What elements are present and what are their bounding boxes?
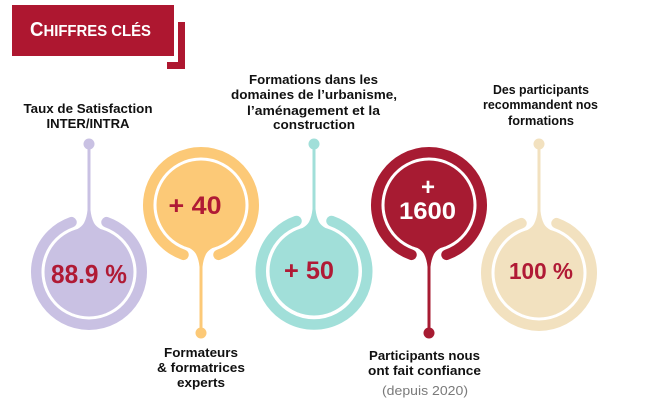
label: formations: l’aménagement et la — [247, 104, 381, 118]
value: 88.9 % — [51, 259, 127, 289]
label: recommandation: recommandent nos — [483, 98, 598, 112]
label: participants — [368, 349, 481, 398]
stat: participants +1600 — [368, 152, 482, 398]
label: recommandation: formations — [508, 114, 574, 128]
title text: CHIFFRES CLÉS — [30, 19, 151, 41]
label: formations: construction — [273, 118, 355, 132]
label: formations: Formations dans les — [249, 73, 378, 87]
label: participants: ont fait confiance — [368, 364, 481, 378]
value — [399, 174, 456, 225]
stat: recommandation 100 % — [483, 83, 598, 326]
value: + 50 — [284, 257, 334, 285]
label: formations: domaines de l’urbanisme, — [231, 88, 397, 102]
value: 100 % — [509, 258, 573, 284]
value: + — [421, 174, 435, 201]
label: formateurs: & formatrices — [157, 361, 245, 375]
title background — [12, 5, 174, 56]
purple drop marker — [36, 138, 142, 325]
red drop marker — [376, 152, 482, 338]
value: + 40 — [168, 192, 222, 220]
title banner — [12, 5, 185, 69]
stat: formations +50 — [231, 73, 397, 325]
label: recommandation — [483, 83, 598, 128]
orange drop marker — [148, 152, 254, 338]
label: participants: (depuis 2020) — [382, 383, 468, 398]
label: formateurs: Formateurs — [164, 346, 238, 360]
stat: taux de satisfaction 88.9 % — [24, 102, 152, 325]
label: formations — [231, 73, 397, 132]
stat: formateurs +40 — [148, 152, 254, 390]
label: taux de satisfaction: INTER/INTRA — [46, 117, 130, 131]
label: formateurs: experts — [177, 376, 225, 390]
label: taux de satisfaction — [24, 102, 152, 131]
label: taux de satisfaction: Taux de Satisfaction — [24, 102, 152, 116]
label: recommandation: Des participants — [493, 83, 589, 97]
teal drop marker — [261, 138, 367, 325]
cream drop marker — [486, 138, 592, 326]
corner bracket — [167, 22, 185, 69]
label: formateurs — [157, 346, 245, 390]
label: participants: Participants nous — [369, 349, 480, 363]
value: 1600 — [399, 198, 456, 225]
